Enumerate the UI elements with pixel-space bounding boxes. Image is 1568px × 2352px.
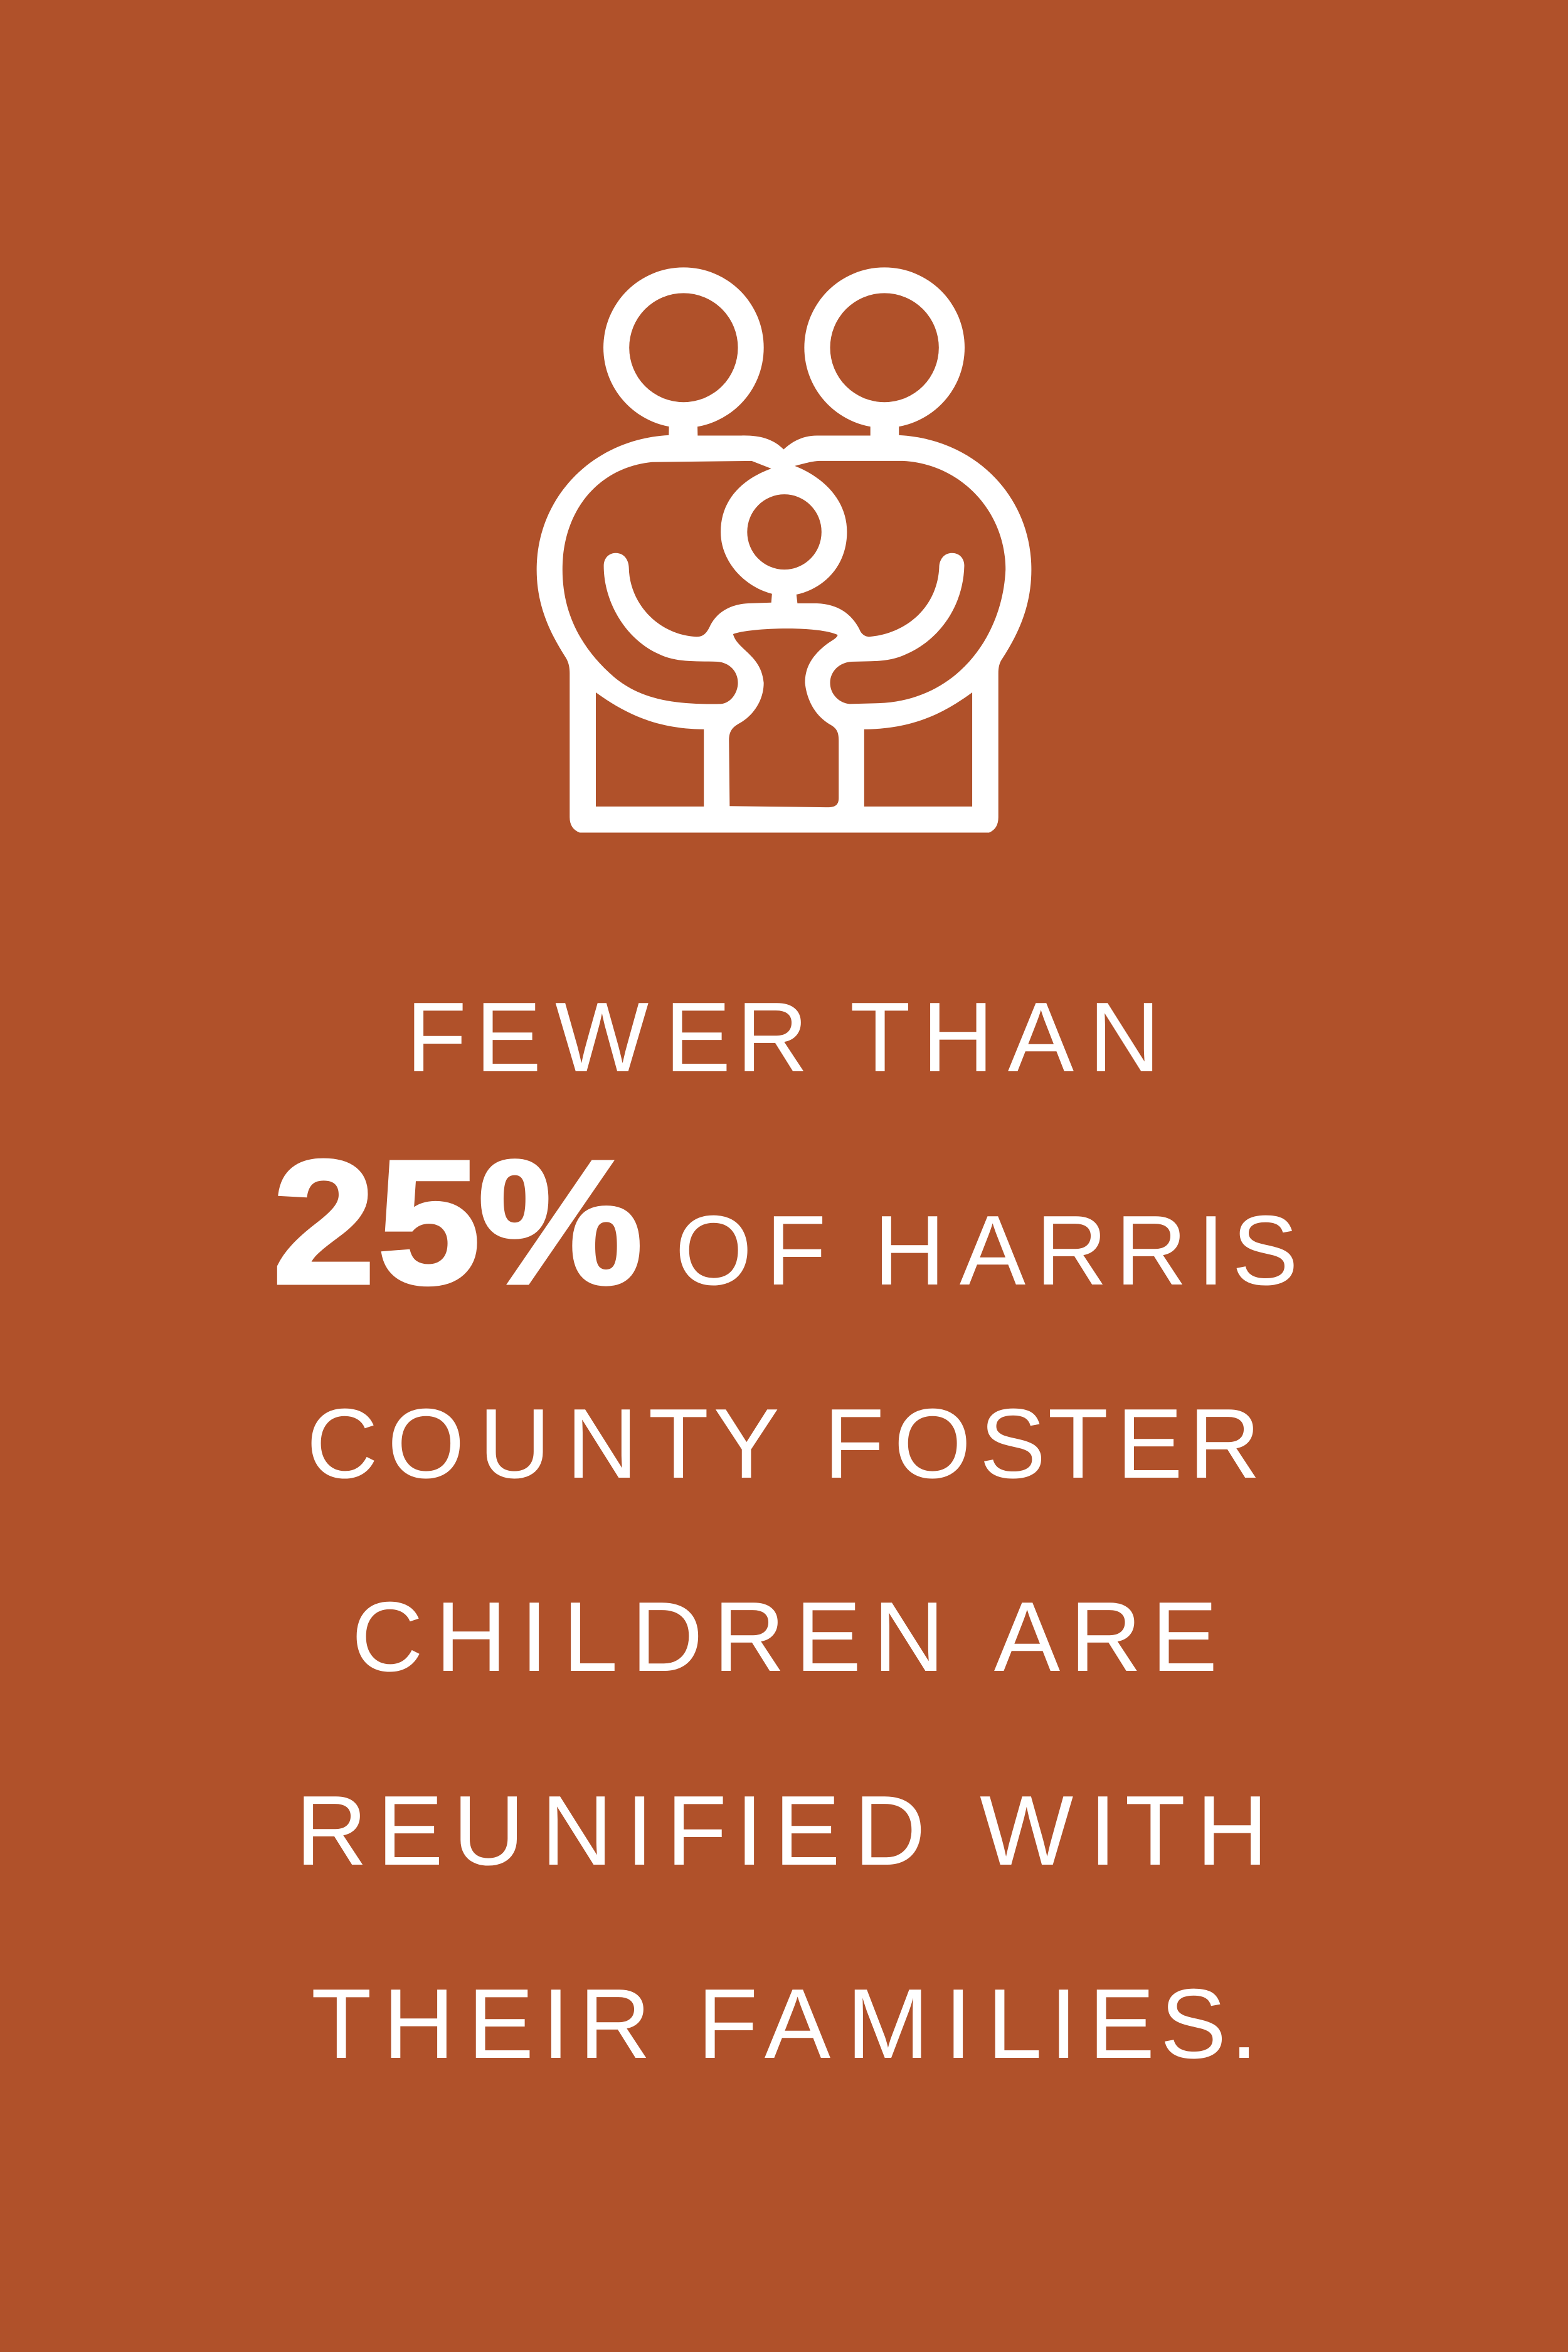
text line: children are [352, 1582, 1217, 1692]
text line: county foster [307, 1389, 1261, 1499]
text line: of Harris: OF [675, 1195, 826, 1306]
text line: children are: ARE [994, 1582, 1217, 1692]
text line: their families [311, 1969, 1258, 2079]
big number: 25%: 25% [272, 1123, 643, 1321]
text line: county foster: COUNTY [307, 1389, 780, 1499]
icon: two parents embracing a child [537, 267, 1031, 832]
text line: county foster: FOSTER [824, 1389, 1261, 1499]
text line: children are: CHILDREN [352, 1582, 945, 1692]
text line: fewer than: THAN [850, 982, 1160, 1093]
text line: fewer than: FEWER [406, 982, 808, 1093]
text line: reunified with: WITH [980, 1776, 1268, 1886]
text line: reunified with [295, 1776, 1268, 1886]
statistic statement text [272, 982, 1298, 2079]
text line: of Harris [675, 1195, 1298, 1306]
text line: their families: FAMILIES. [697, 1969, 1258, 2079]
text line: of Harris: HARRIS [874, 1195, 1298, 1306]
text line: reunified with: REUNIFIED [295, 1776, 926, 1886]
text line: their families: THEIR [311, 1969, 651, 2079]
text line: fewer than [406, 982, 1160, 1093]
